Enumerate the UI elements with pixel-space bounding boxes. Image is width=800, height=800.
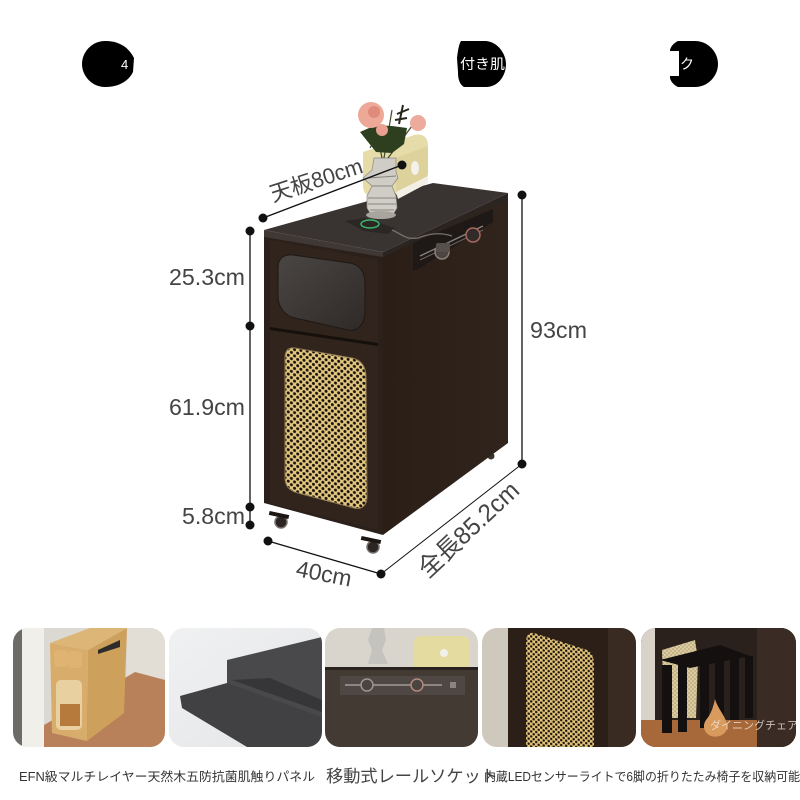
badge: right black oval: [669, 41, 718, 87]
label: 93cm: 93cm: [530, 317, 587, 343]
thumbnail 2: panel layers: [169, 628, 322, 747]
socket rail: [413, 209, 493, 270]
thumbnail 5: folding chairs: [641, 628, 798, 747]
flowers: [358, 102, 426, 158]
label: 25.3cm: 25.3cm: [169, 264, 245, 290]
badge: left black oval: 4: [121, 57, 128, 72]
label: total length 85.2cm: 全長85.2cm: [413, 476, 525, 583]
rattan panel: [285, 348, 367, 508]
door divider: [270, 327, 378, 346]
bottom depth line: [264, 536, 386, 578]
label: top 80cm: 天板80cm: [267, 153, 366, 207]
dimension lines: [246, 160, 526, 578]
badge: right black oval: ク: [680, 56, 694, 72]
badge: middle black oval: [457, 41, 506, 87]
thumbnail 1: wood cabinet: [13, 628, 165, 747]
caption 1: EFN級マルチレイヤー天然木五防抗菌肌触りパネル: [19, 769, 315, 784]
product: cabinet: [264, 102, 508, 553]
thumbnail 3: socket rail: [325, 628, 478, 747]
cabinet front frame: [270, 240, 378, 530]
badge: left black oval: [82, 41, 134, 87]
cabinet side: [383, 195, 508, 535]
upper door handle panel: [278, 255, 365, 330]
label: 40cm: 40cm: [294, 555, 354, 592]
thumbnail 4: rattan close-up: [482, 628, 636, 747]
caption 2: 移動式レールソケット: [326, 767, 498, 786]
top width line: [258, 160, 406, 222]
casters: [269, 452, 494, 553]
toaster: [363, 135, 428, 199]
vase: [363, 158, 398, 219]
thumbnail 5: folding chairs: ダイニングチェア: [710, 718, 798, 732]
wireless charger: [345, 218, 452, 238]
top edge: [264, 230, 383, 257]
cabinet top: [264, 183, 508, 252]
label: 5.8cm: 5.8cm: [182, 503, 245, 529]
bottom length line: [381, 464, 522, 574]
badge: middle black oval: 付き肌: [460, 56, 505, 72]
left height line: [246, 226, 254, 530]
label: 61.9cm: 61.9cm: [169, 394, 245, 420]
cabinet front: [264, 232, 383, 535]
right height line: [518, 190, 526, 468]
